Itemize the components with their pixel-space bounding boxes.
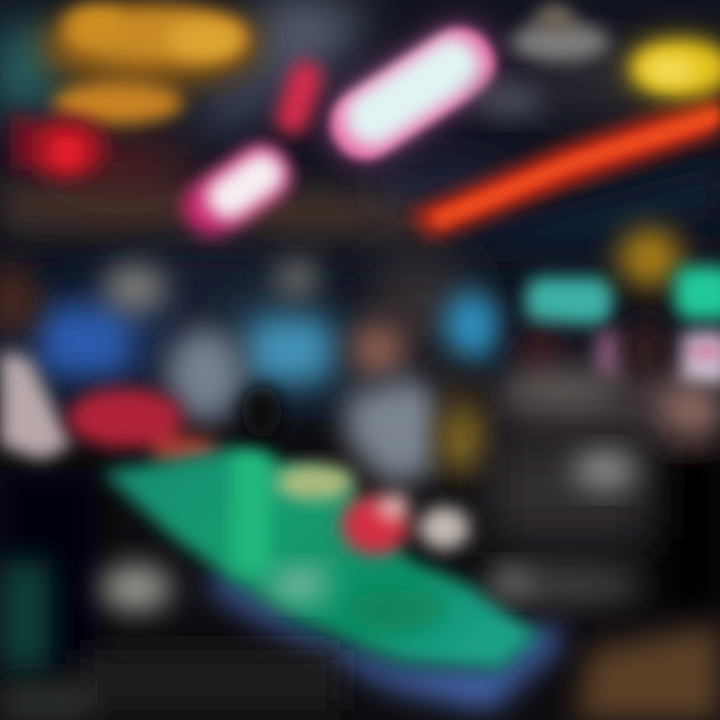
pink and white capsule sign bbox=[312, 10, 512, 176]
grey lamp blobs bbox=[103, 258, 321, 312]
blue-grey screen centre bbox=[250, 320, 330, 380]
green sign bbox=[674, 266, 720, 320]
red and white chips bbox=[341, 493, 471, 555]
cyan screen bbox=[444, 290, 500, 362]
wooden floor bottom right bbox=[575, 625, 720, 720]
red chair bbox=[67, 388, 219, 468]
centre person bbox=[345, 322, 490, 485]
blue screen left bbox=[42, 310, 128, 372]
mid-room back wall glow bbox=[10, 250, 720, 434]
orange ceiling lights bbox=[40, 3, 260, 125]
red diagonal sign bbox=[271, 56, 327, 139]
grey figure left of centre bbox=[165, 327, 282, 438]
yellow oval light bbox=[624, 36, 720, 100]
red light bbox=[10, 115, 107, 180]
green poker table bbox=[102, 448, 565, 710]
grey cards and dark furniture bbox=[100, 440, 650, 612]
gold lamp bbox=[618, 228, 682, 288]
dark foreground bottom left bbox=[0, 650, 340, 720]
ceiling beam bbox=[0, 165, 720, 270]
pink and white panel right bbox=[596, 332, 720, 384]
teal sign bbox=[525, 277, 613, 325]
orange-red neon band bbox=[410, 92, 720, 242]
grey top-right fixture bbox=[476, 5, 610, 116]
white and pink lower sign bbox=[172, 134, 301, 248]
left seated person bbox=[0, 264, 100, 670]
right-side crowd bbox=[500, 318, 720, 610]
top colour haze bbox=[0, 0, 670, 203]
